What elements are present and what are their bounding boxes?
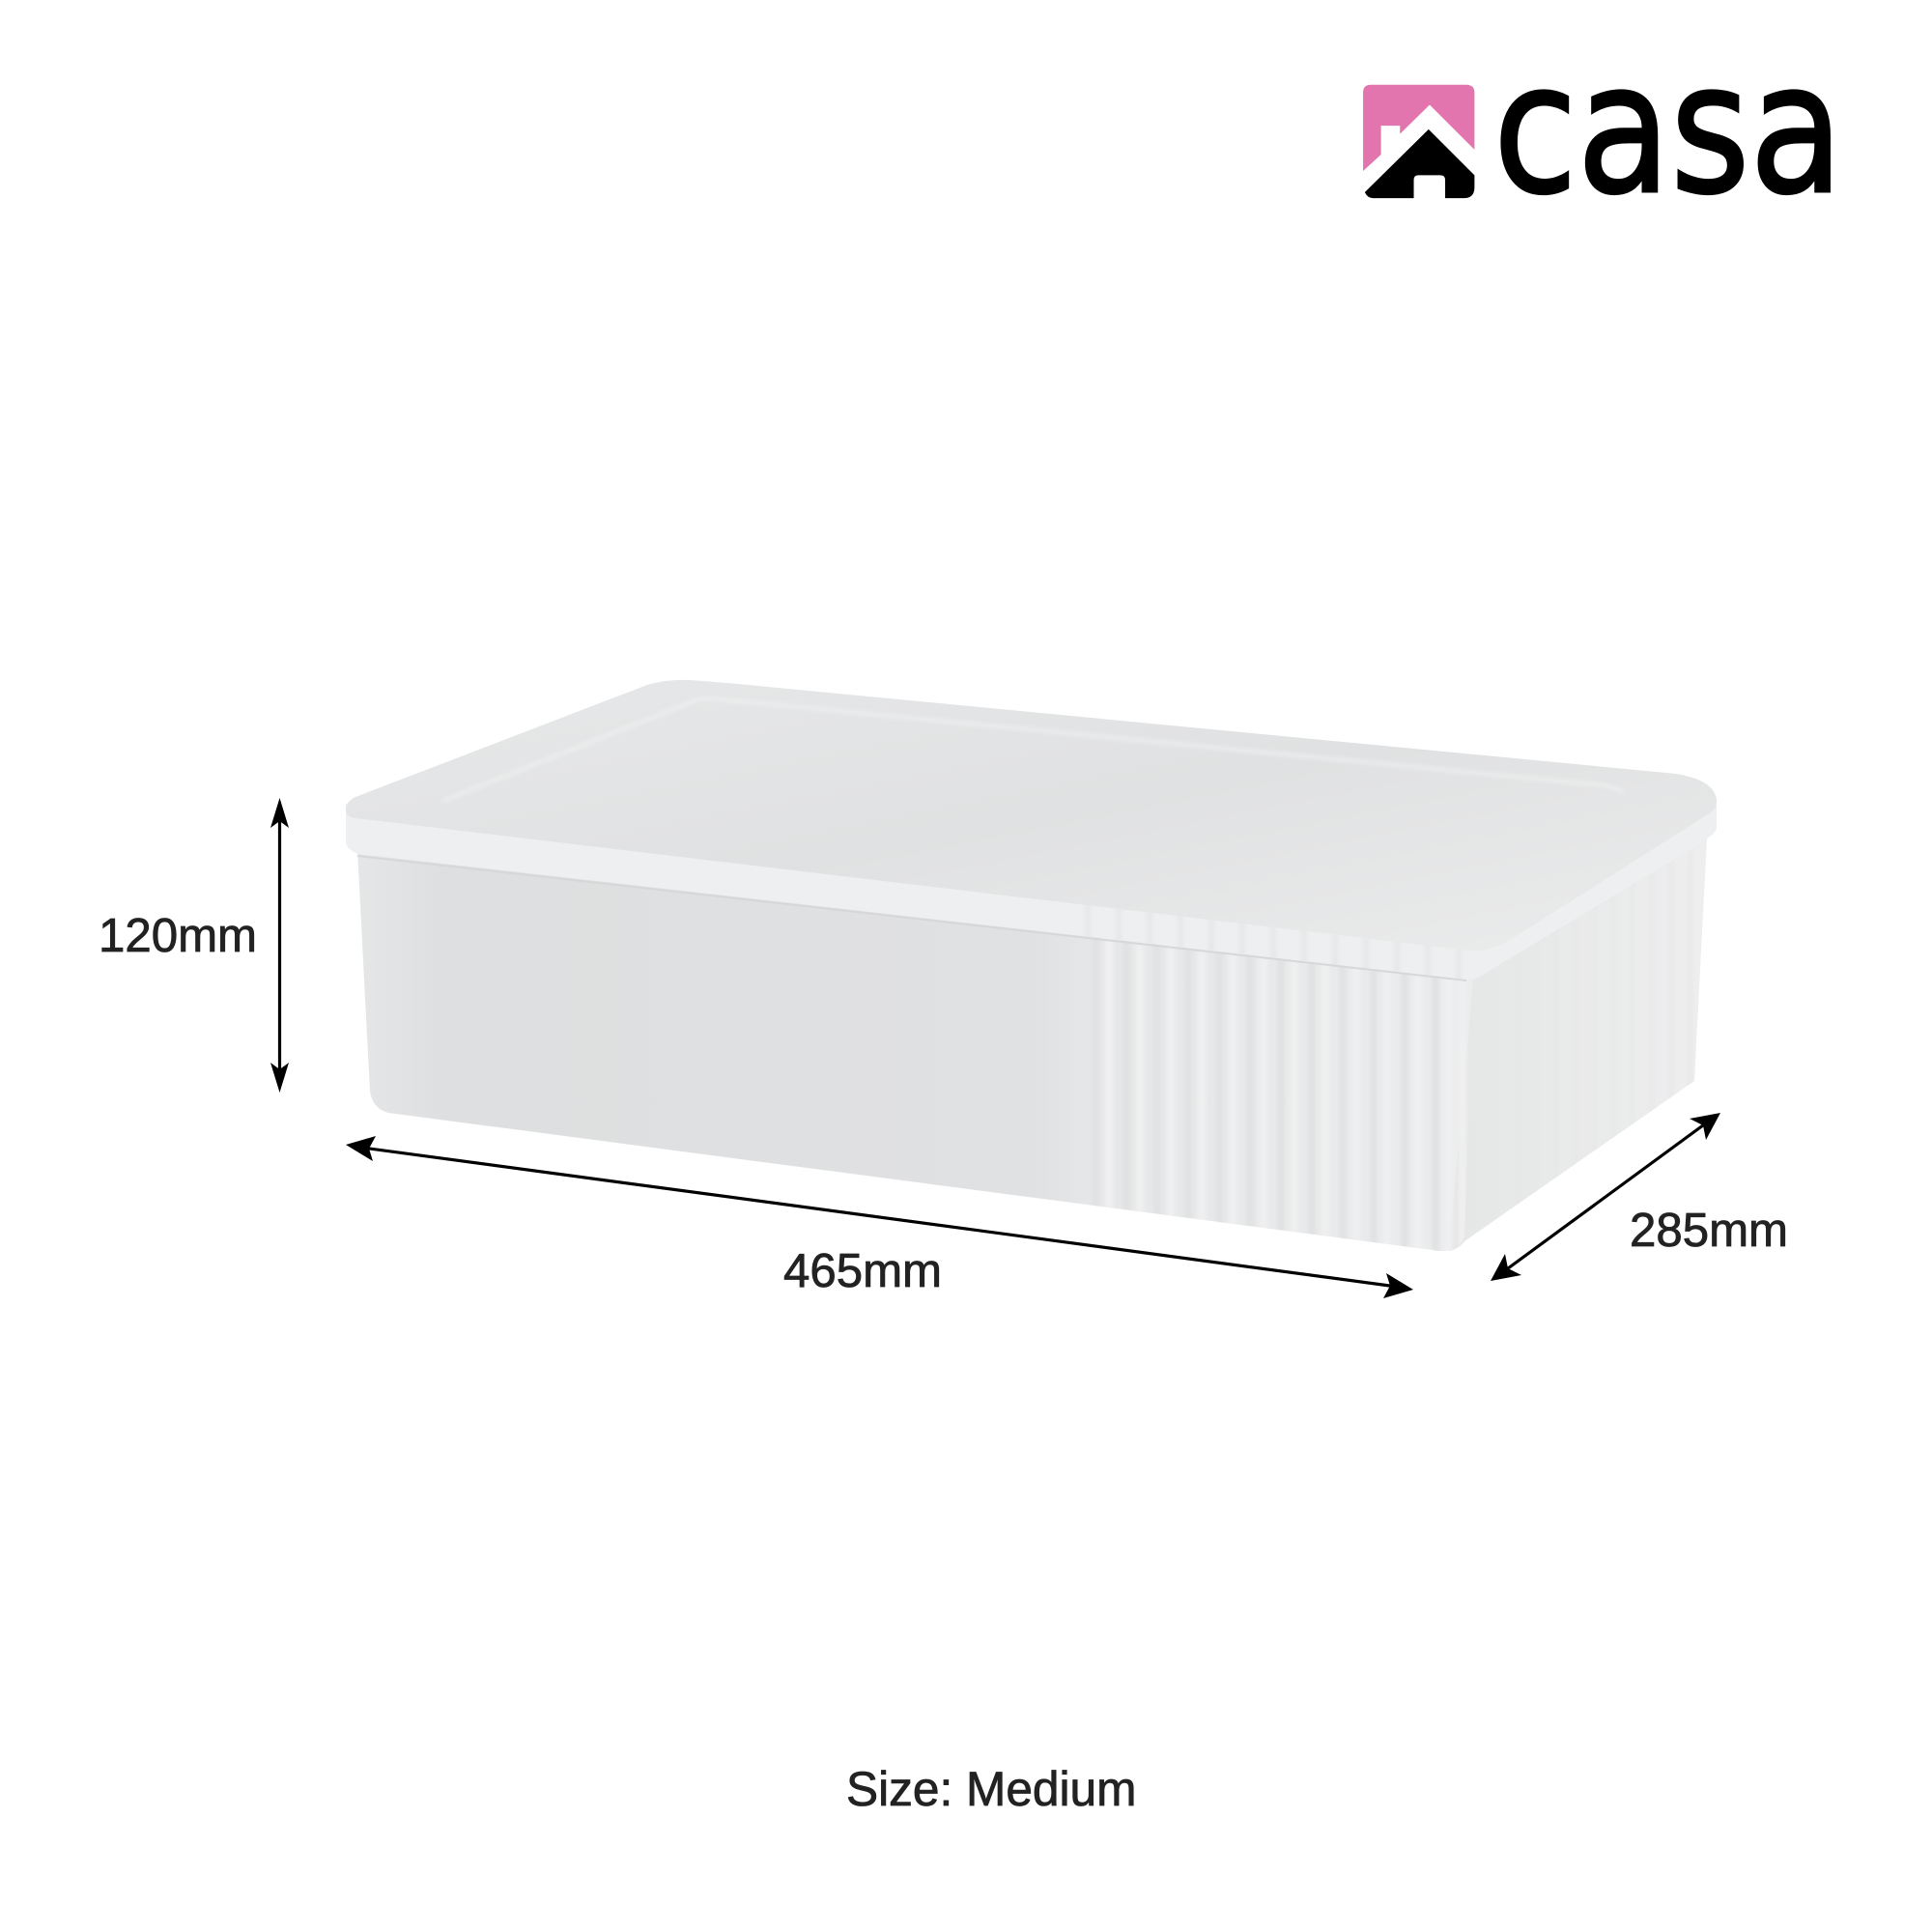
- label: width: 465mm: [783, 1244, 942, 1297]
- box right side: [1449, 838, 1707, 1251]
- arrow: height: [270, 798, 289, 1093]
- lid front and side edge: [346, 798, 1717, 980]
- lid top: [346, 680, 1717, 951]
- bottom scallops: [1111, 1084, 1694, 1254]
- logo: casa: [1363, 24, 1843, 234]
- side ribs: [1517, 831, 1690, 1256]
- front ribs: [1107, 941, 1464, 1250]
- lid recess: [443, 698, 1623, 801]
- label: depth: 285mm: [1630, 1204, 1788, 1257]
- arrow: width: [346, 1136, 1413, 1298]
- label: height: 120mm: [99, 909, 257, 962]
- size caption: Size: Medium: [846, 1762, 1136, 1816]
- logo wordmark: casa: [1493, 24, 1843, 234]
- lid ribs: [1088, 898, 1459, 985]
- icon: pink square with house: [1363, 85, 1474, 198]
- lid shadow line: [357, 856, 1466, 980]
- box front face: [357, 850, 1478, 1251]
- infographic canvas: [101, 85, 1831, 1806]
- arrow: depth: [1491, 1113, 1720, 1281]
- product: white storage box with lid: [346, 680, 1717, 1265]
